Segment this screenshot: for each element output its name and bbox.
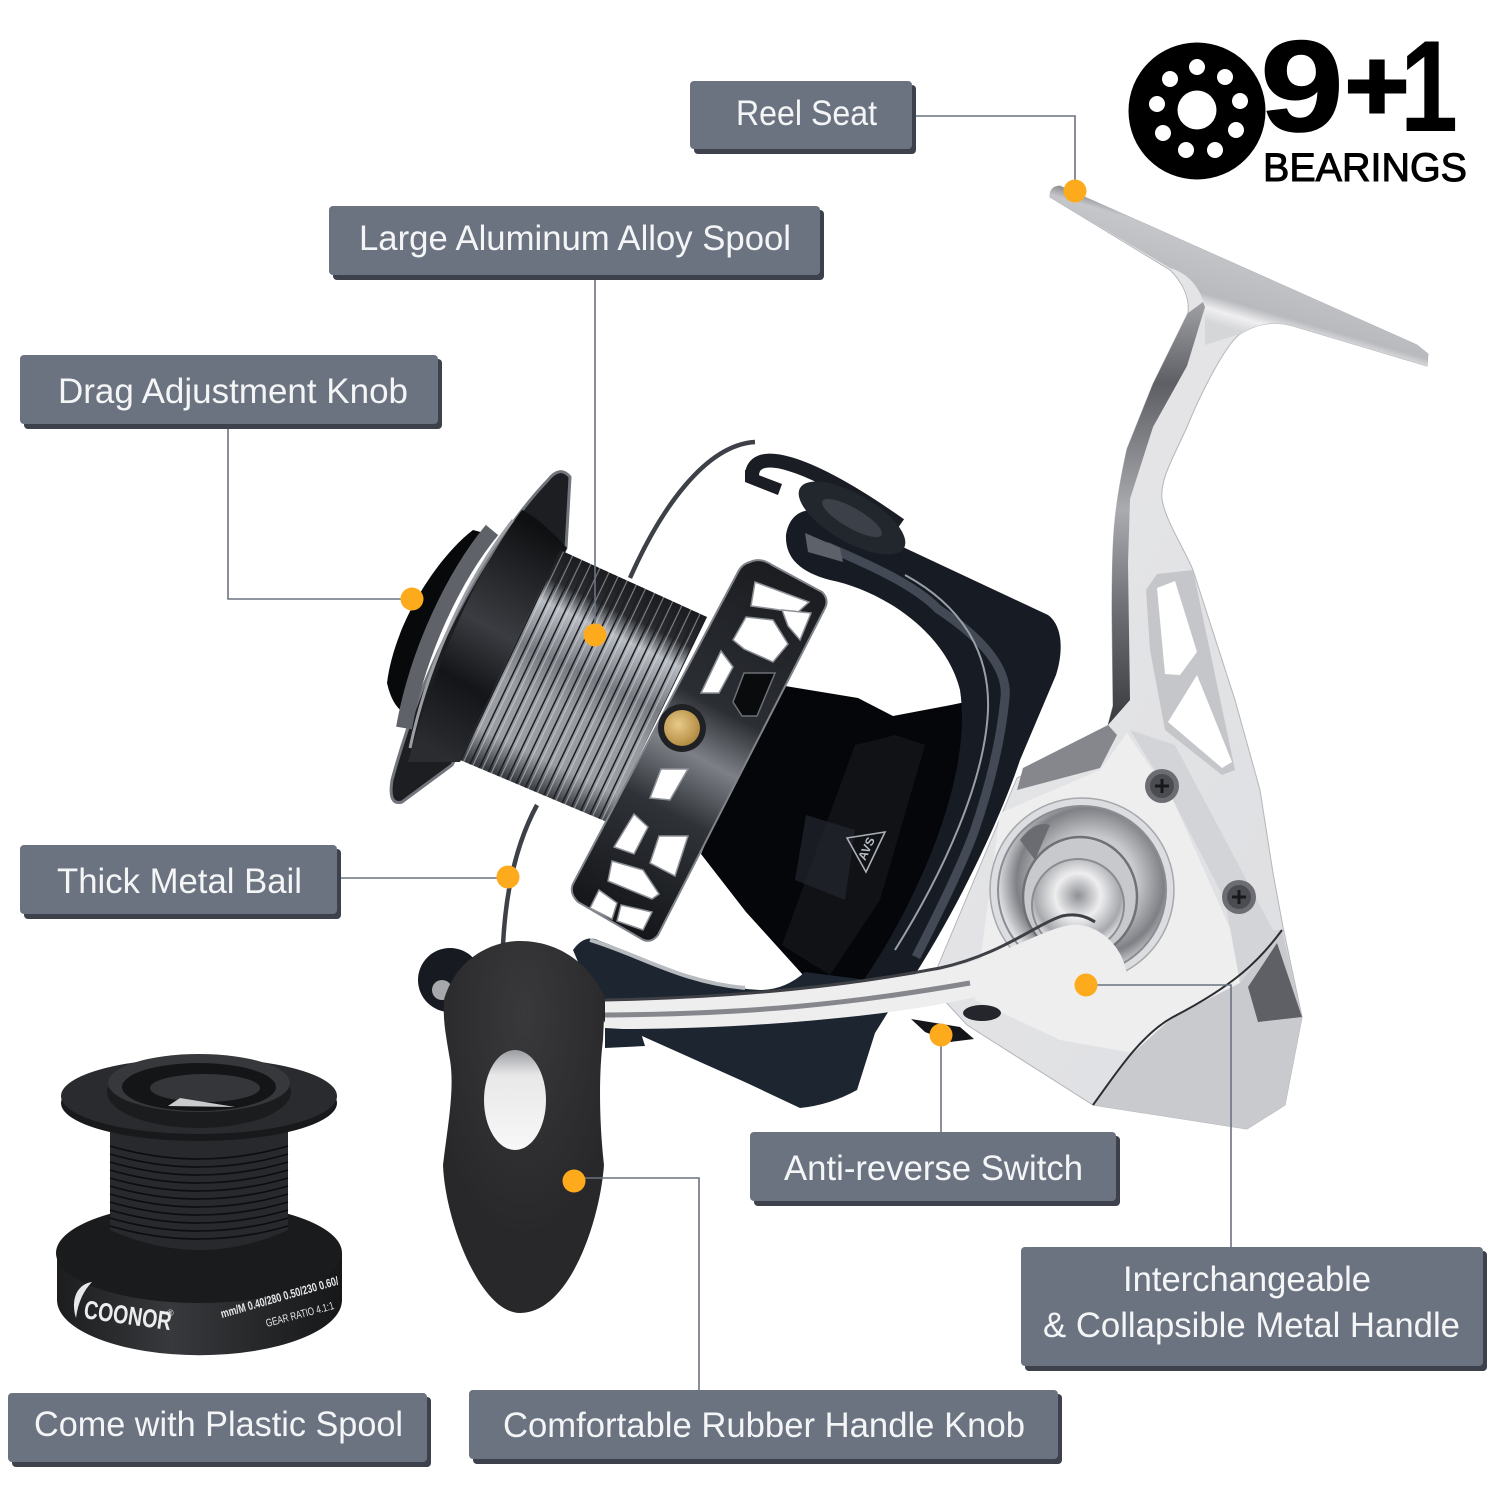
brass pin [658,704,706,752]
drag adjustment knob [387,520,513,748]
metal handle arm [605,925,1127,1029]
bearing caption: BEARINGS [1263,146,1467,190]
label: drag knob: Drag Adjustment Knob [58,372,408,411]
dark facet [1248,943,1302,1022]
brand mark [74,1282,174,1336]
handle mid stripe [605,983,970,1015]
silver frame and reel seat [930,186,1428,1129]
illustration: plastic spool [56,1054,342,1355]
bearing count: 1 [1400,13,1458,159]
spool groove highlights [513,656,657,725]
stem chrome band [1108,302,1205,725]
rotor step [782,735,925,975]
spool body [460,550,707,822]
switch base [963,1005,1001,1021]
label: reel seat [690,81,916,154]
spool neck [408,510,567,762]
handle stub [605,1028,645,1048]
label: reel seat: Reel Seat [736,94,877,133]
label: anti-reverse switch [750,1132,1120,1206]
top flange [61,1054,337,1141]
stem window [1146,570,1235,775]
label: metal handle [1021,1247,1487,1371]
frame screws [1145,769,1256,914]
body seam [1093,930,1282,1105]
icon: bearing [1128,42,1266,180]
body side strip [1130,730,1282,983]
reel seat bar [1050,186,1428,366]
label: metal handle: & Collapsible Metal Handle [1043,1306,1460,1345]
rotor gloss [795,815,855,900]
body panel [975,733,1247,1053]
leader lines [228,116,1231,1390]
brand mark: ® [167,1308,174,1318]
gear hub [990,798,1174,982]
bearing count [1260,13,1458,159]
label: anti-reverse switch: Anti-reverse Switch [784,1149,1083,1188]
rotor body [701,684,975,985]
chrome ribbon above body [1017,725,1117,790]
bail wire [503,442,755,945]
handle dark edge [605,915,1095,1000]
gear ratio text: GEAR RATIO 4.1:1 [265,1300,335,1330]
AVS mark [847,832,885,872]
label: plastic spool: Come with Plastic Spool [34,1405,403,1444]
label: rubber knob: Comfortable Rubber Handle Knob [503,1406,1025,1445]
icon: 9+1 bearings badge [1128,13,1467,190]
arm lobe highlight [805,533,843,562]
lower body facet [1093,930,1302,1129]
line capacity text: mm/M 0.40/280 0.50/230 0.60/ [219,1274,341,1321]
label: spool: Large Aluminum Alloy Spool [359,219,791,258]
label: spool [329,206,824,280]
bail roller [745,461,916,569]
cage openings [590,582,811,930]
spool barrel [110,1130,288,1250]
spool grooves [510,655,657,725]
spool cage [572,560,827,941]
label: metal handle: Interchangeable [1123,1260,1371,1299]
anti-reverse switch [911,1019,974,1042]
rubber handle knob [443,941,605,1313]
upper bail arm [786,510,1061,990]
label: plastic spool [8,1393,431,1467]
lower bail arm [573,938,905,1108]
AVS mark: AVS [855,835,878,862]
bearing count: 9 [1260,13,1344,159]
illustration: fishing reel [387,186,1428,1313]
spool base [56,1203,342,1355]
marker dots [400,180,1098,1192]
label: metal bail: Thick Metal Bail [57,862,302,901]
arm thin highlight [895,575,988,950]
label: metal bail [20,845,341,919]
label: drag knob [20,355,442,429]
bearing count: + [1345,30,1409,142]
brand mark: COONOR [82,1294,174,1336]
arm gloss [826,546,1005,957]
spool front flange [391,472,570,803]
handle knob base [418,948,482,1012]
barrel grooves [110,1146,288,1239]
lower arm highlight [590,940,745,988]
label: rubber knob [469,1390,1062,1464]
